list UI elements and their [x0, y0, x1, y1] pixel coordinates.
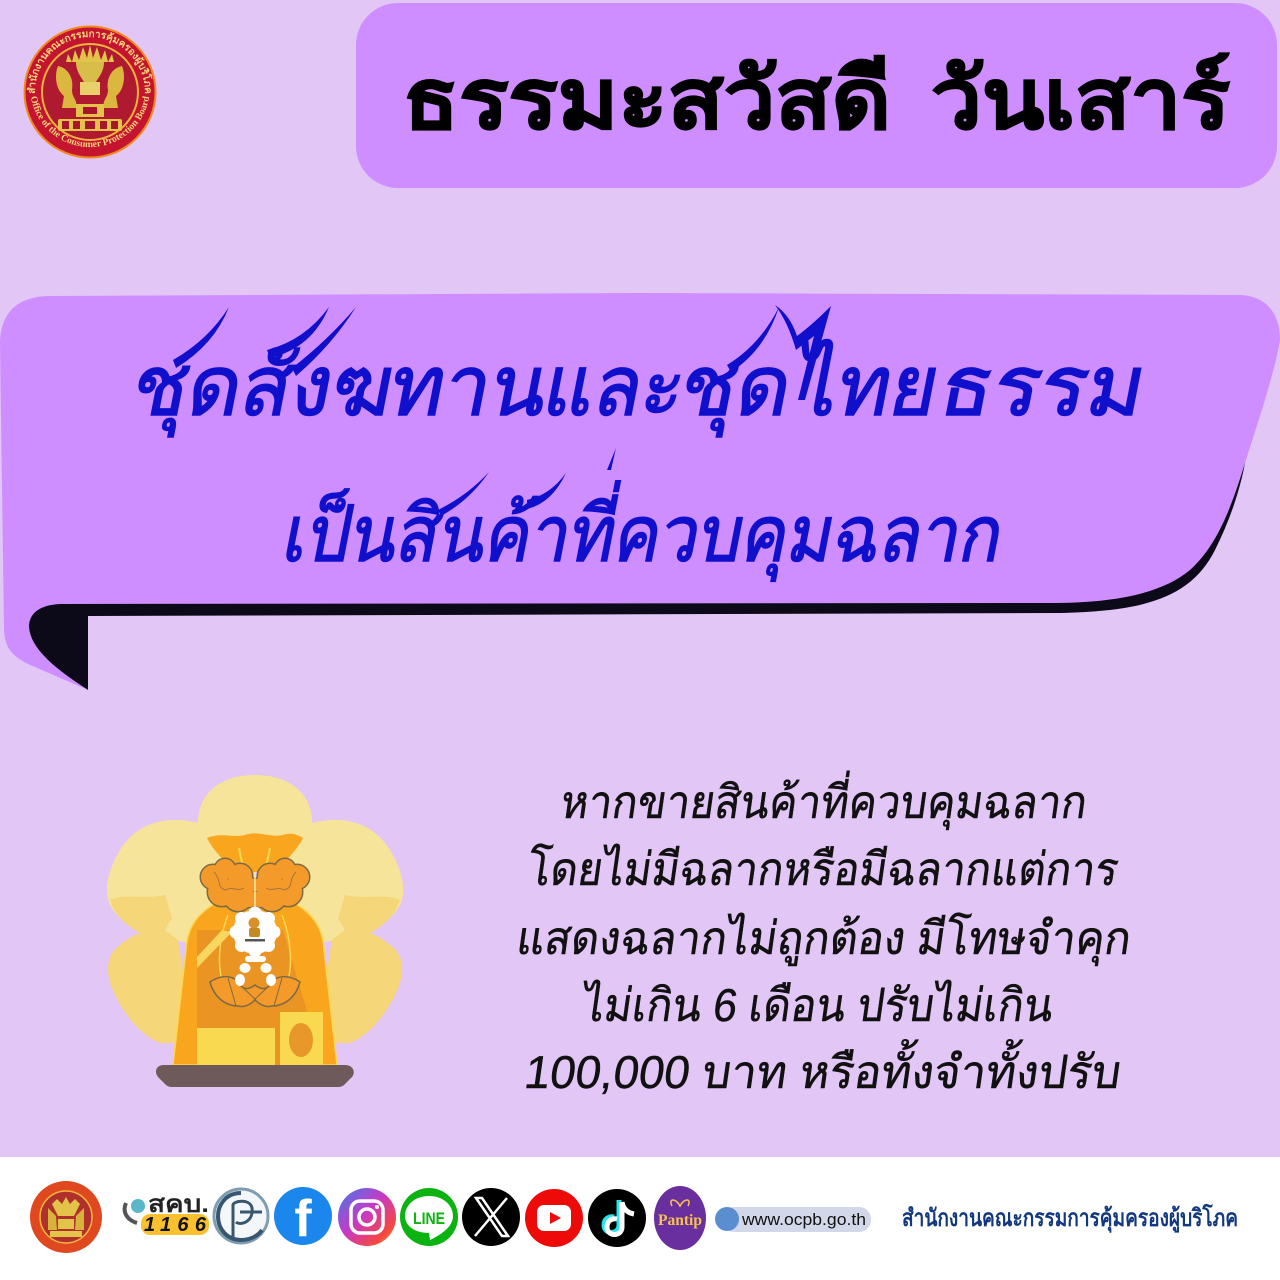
text block: penalty notice: แสดงฉลากไม่ถูกต้อง มีโทษจำคุก [513, 912, 1135, 967]
heading: banner line 1: ทาน [383, 339, 557, 433]
icon: tiktok [588, 1189, 646, 1247]
icon: hotline 1166 [125, 1191, 209, 1236]
logo: office seal [24, 26, 156, 158]
heading: banner line 1: ชุด [672, 339, 801, 438]
marigold tie [201, 859, 309, 911]
panel: footer bar [0, 1157, 1280, 1280]
label panels [197, 1028, 275, 1065]
title: ธรรมะสวัสดี [403, 52, 891, 146]
icon: hotline 1166: 1166 [144, 1214, 207, 1236]
icon: sangha offering set [107, 775, 403, 1087]
logo: office seal: Office of the Consumer Protection Board [31, 96, 150, 148]
panel: top title pill [356, 3, 1277, 188]
title [403, 52, 1230, 146]
text block: penalty notice [513, 770, 1135, 1098]
icon: X [462, 1188, 520, 1246]
icon: website pill [715, 1207, 871, 1232]
text block: penalty notice: โดยไม่มีฉลากหรือมีฉลากแต่การ [525, 843, 1122, 895]
text block: penalty notice: ไม่เกิน 6 เดือน ปรับไม่เกิน [576, 979, 1057, 1031]
icon: line: LINE [413, 1209, 445, 1228]
heading: banner line 1: ไทย [784, 339, 948, 433]
icon: youtube [525, 1189, 583, 1247]
tray [156, 1065, 354, 1087]
icon: website pill: www.ocpb.go.th [741, 1211, 866, 1229]
jasmine and garland [210, 977, 300, 1006]
decorative heading flourishes [173, 305, 831, 516]
icon: instagram [338, 1188, 396, 1246]
icon: facebook: f [294, 1190, 312, 1248]
heading: banner line 2: เป็นสินค้าที่ควบคุมฉลาก [276, 481, 1014, 582]
bag body [173, 898, 337, 1065]
bag neck [207, 833, 303, 872]
icon: pantip [654, 1186, 706, 1250]
heading: banner line 1: และ [537, 339, 694, 433]
icon: facebook [274, 1187, 332, 1248]
icon: hotline 1166: สคบ. [148, 1191, 209, 1218]
white flower badge [230, 906, 280, 958]
panel: ribbon banner [0, 293, 1280, 690]
heading: banner line 1 [124, 339, 1155, 438]
title: วันเสาร์ [931, 52, 1230, 146]
garland strings [219, 915, 291, 985]
logo: office seal: สำนักงานคณะกรรมการคุ้มครองผู้บริโภค [26, 31, 153, 94]
logo: footer seal [30, 1181, 102, 1253]
icon: line [400, 1188, 458, 1246]
text block: penalty notice: 100,000 บาท หรือทั้งจำทั้งปรับ [522, 1039, 1126, 1098]
icon: pantip: Pantip [658, 1212, 702, 1229]
icon: OCPB mark [214, 1189, 268, 1243]
halo petals [107, 775, 403, 1043]
text block: penalty notice: หากขายสินค้าที่ควบคุมฉลาก [557, 770, 1092, 831]
heading: banner line 1: ธรรม [933, 339, 1155, 433]
heading: banner line 1: ชุดสังฆ [124, 339, 403, 438]
